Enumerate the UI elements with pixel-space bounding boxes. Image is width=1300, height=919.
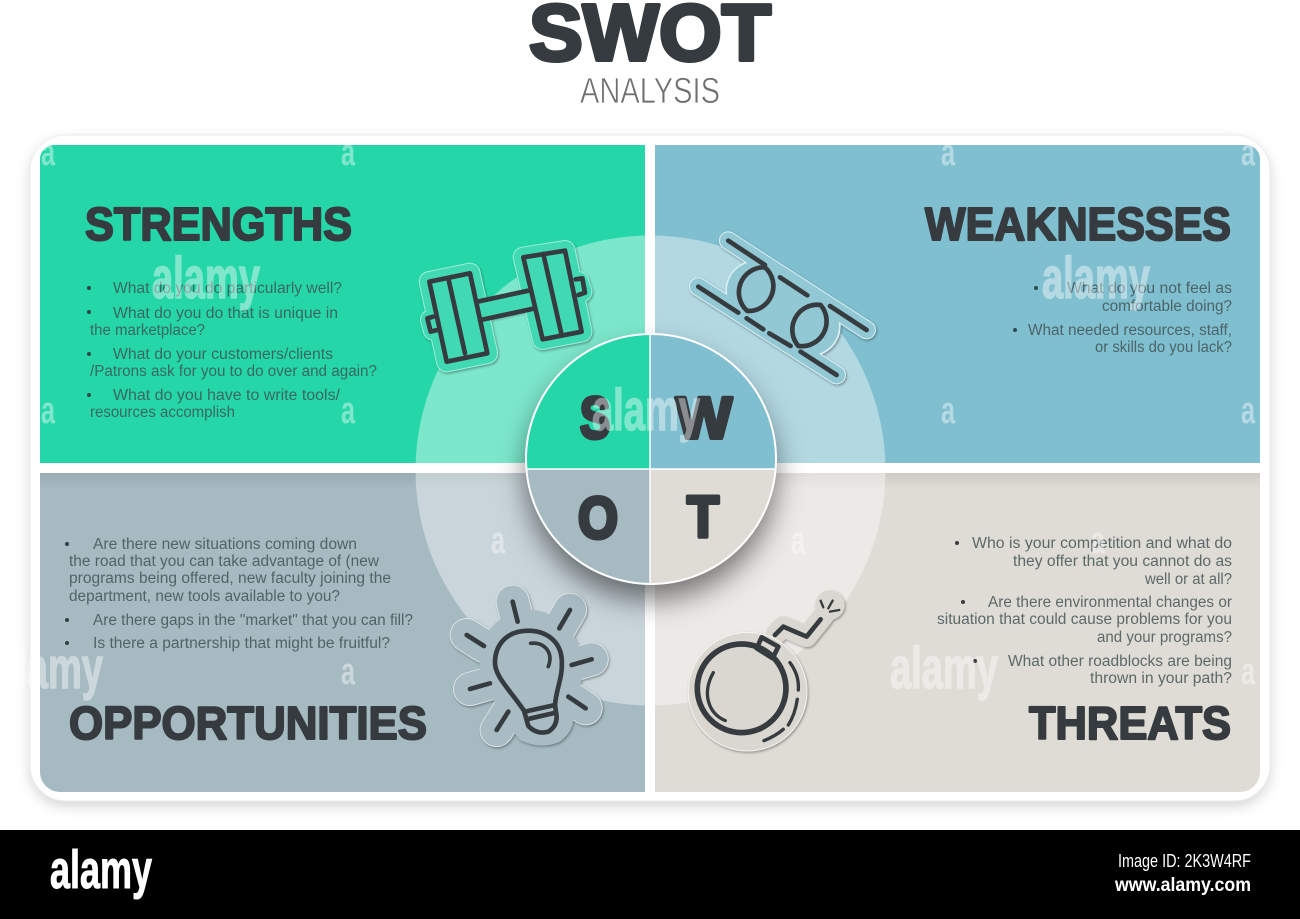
text block: opportunities questions [65, 536, 413, 652]
footer logo: alamy [50, 840, 152, 900]
text block: strengths questions [87, 280, 377, 421]
panel: opportunities [40, 473, 645, 792]
watermarks: a [1241, 390, 1256, 432]
watermarks [0, 132, 1256, 701]
large translucent circle [416, 236, 886, 706]
white rounded card [30, 135, 1270, 801]
watermarks: a [491, 520, 506, 562]
text block: threats questions: well or at all? [1144, 571, 1232, 588]
panel: threats [655, 473, 1260, 792]
text block: threats questions: What other roadblocks are being [1008, 653, 1232, 670]
watermarks: a [341, 132, 356, 174]
watermarks: a [1091, 520, 1106, 562]
title: ANALYSIS [580, 70, 720, 111]
heading: threats: THREATS [1029, 697, 1231, 749]
text block: weaknesses questions [1013, 280, 1232, 356]
text block: strengths questions: What do your customers/clients [113, 346, 333, 363]
text block: weaknesses questions: or skills do you lack? [1095, 339, 1232, 356]
text block: weaknesses questions: What do you not feel as [1067, 280, 1232, 297]
icon: light bulb [467, 602, 592, 745]
watermarks: alamy [1042, 246, 1150, 311]
letter W: W [676, 386, 732, 451]
watermarks: alamy [890, 636, 998, 701]
watermarks: alamy [592, 378, 700, 443]
watermarks: a [941, 390, 956, 432]
icon: dumbbell [427, 251, 585, 362]
text block: opportunities questions: programs being offered, new faculty joining the [69, 570, 391, 587]
text block: threats questions: Who is your competition and what do [972, 535, 1232, 552]
text block: threats questions: and your programs? [1097, 629, 1232, 646]
letter S: S [580, 386, 610, 451]
watermarks: a [1241, 132, 1256, 174]
heading: opportunities: OPPORTUNITIES [69, 697, 427, 749]
centre SWOT circle [526, 334, 776, 584]
text block: strengths questions: the marketplace? [90, 322, 205, 339]
watermarks: a [791, 520, 806, 562]
text block: strengths questions: resources accomplish [90, 404, 235, 421]
watermarks: alamy [152, 246, 260, 311]
text block: strengths questions: What do you have to write tools/ [113, 387, 341, 404]
watermarks: a [41, 132, 56, 174]
text block: opportunities questions: Are there gaps in the "market" that you can fill? [93, 612, 413, 629]
text block: weaknesses questions: comfortable doing? [1102, 298, 1232, 315]
website: www.alamy.com [1114, 875, 1251, 896]
text block: threats questions: Are there environmental changes or [988, 594, 1232, 611]
image id: Image ID: 2K3W4RF [1118, 851, 1251, 871]
text block: threats questions: they offer that you cannot do as [1013, 553, 1232, 570]
watermarks: a [41, 390, 56, 432]
text block: opportunities questions: the road that you can take advantage of (new [69, 553, 380, 570]
footer bar [0, 830, 1300, 919]
text block: opportunities questions: department, new tools available to you? [69, 588, 340, 605]
icon: bomb [688, 590, 845, 751]
title [529, 0, 771, 111]
text block: threats questions: thrown in your path? [1090, 670, 1232, 687]
letter O: O [578, 486, 618, 551]
text block: strengths questions: /Patrons ask for you to do over and again? [90, 363, 377, 380]
watermarks: a [941, 132, 956, 174]
text block: opportunities questions: Is there a partnership that might be fruitful? [93, 635, 390, 652]
watermarks: a [1241, 651, 1256, 693]
watermarks: a [341, 651, 356, 693]
heading: strengths: STRENGTHS [85, 198, 352, 250]
text block: opportunities questions: Are there new situations coming down [93, 536, 357, 553]
text block: threats questions [937, 535, 1232, 687]
text block: threats questions: situation that could cause problems for you [937, 611, 1232, 628]
letter T: T [687, 485, 719, 550]
text block: weaknesses questions: What needed resources, staff, [1028, 322, 1232, 339]
text block: strengths questions: What do you do particularly well? [113, 280, 342, 297]
panel: strengths [40, 145, 645, 463]
heading: weaknesses: WEAKNESSES [925, 198, 1231, 250]
icon: broken chain [698, 241, 867, 375]
watermarks: a [341, 390, 356, 432]
text block: strengths questions: What do you do that is unique in [113, 305, 338, 322]
panel: weaknesses [655, 145, 1260, 463]
